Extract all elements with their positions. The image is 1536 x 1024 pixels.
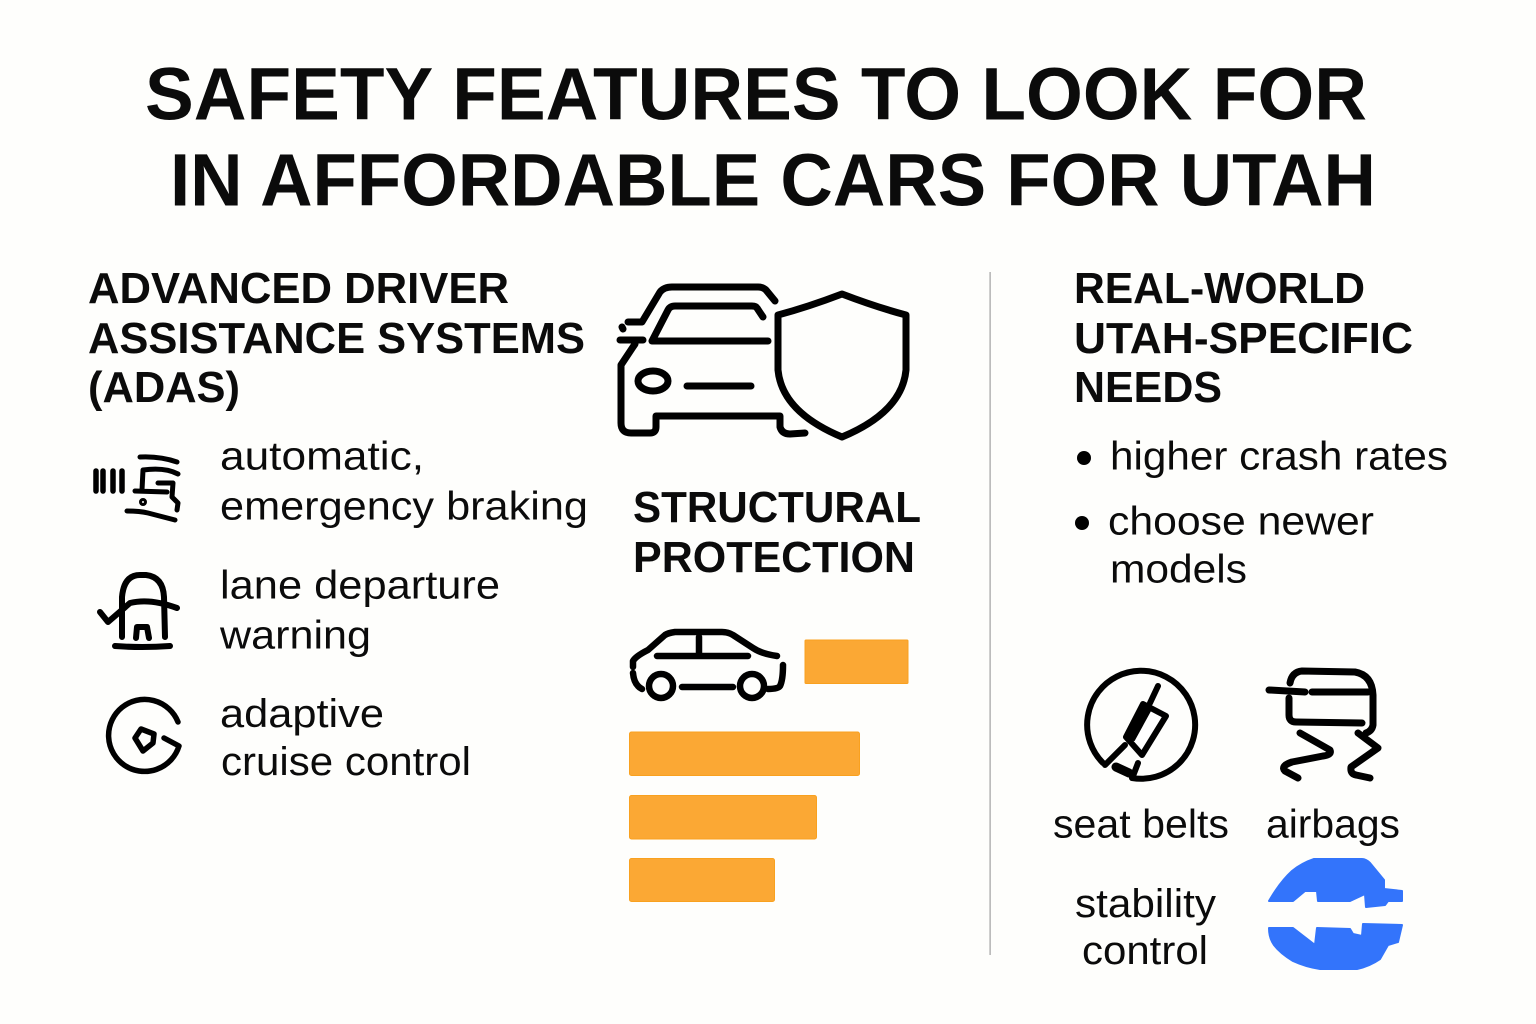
text: automatic emergency braking <box>220 434 588 528</box>
heading: ADAS: (ADAS) <box>88 363 240 412</box>
heading: real-world needs <box>1074 264 1413 412</box>
text: lane departure warning: lane departure <box>220 564 500 608</box>
icon: car with shield <box>620 287 906 437</box>
icon: adaptive cruise control <box>109 699 179 771</box>
title <box>145 52 1376 222</box>
bar chart: structural protection <box>630 640 908 902</box>
text: automatic emergency braking: automatic, <box>220 434 424 478</box>
label: stability control: control <box>1082 929 1208 973</box>
label: seat belts: seat belts <box>1053 802 1229 846</box>
title: IN AFFORDABLE CARS FOR UTAH <box>170 138 1376 222</box>
label: airbags: airbags <box>1266 802 1400 846</box>
icon: side view car <box>633 632 783 698</box>
heading: ADAS <box>88 264 585 412</box>
icon: lane departure warning <box>100 575 177 647</box>
bullet list: choose newer <box>1108 500 1374 544</box>
heading: structural protection: STRUCTURAL <box>633 483 921 532</box>
text: adaptive cruise control <box>220 692 471 784</box>
heading: real-world needs: REAL-WORLD <box>1074 264 1365 313</box>
icon: seat belts <box>1087 671 1195 779</box>
panel: real-world Utah-specific needs <box>1053 264 1448 973</box>
text: lane departure warning <box>219 564 500 658</box>
text: lane departure warning: warning <box>219 614 371 658</box>
bullet list <box>1075 434 1448 592</box>
label: stability control: stability <box>1075 882 1216 926</box>
text: adaptive cruise control: cruise control <box>221 740 471 784</box>
bullet list: higher crash rates <box>1110 434 1448 478</box>
heading: ADAS: ASSISTANCE SYSTEMS <box>88 314 585 363</box>
heading: structural protection <box>633 483 921 582</box>
heading: ADAS: ADVANCED DRIVER <box>88 264 509 313</box>
heading: real-world needs: UTAH-SPECIFIC <box>1074 314 1413 363</box>
title: SAFETY FEATURES TO LOOK FOR <box>145 52 1367 136</box>
bullet list: models <box>1110 548 1247 592</box>
heading: structural protection: PROTECTION <box>633 533 915 582</box>
heading: real-world needs: NEEDS <box>1074 363 1222 412</box>
text: automatic emergency braking: emergency braking <box>220 484 588 528</box>
text: adaptive cruise control: adaptive <box>220 692 384 736</box>
icon: automatic emergency braking <box>96 457 178 520</box>
icon: airbags <box>1269 671 1378 778</box>
label: stability control <box>1075 882 1216 973</box>
panel: advanced driver assistance systems <box>88 264 588 784</box>
icon: stability control <box>1269 859 1402 969</box>
